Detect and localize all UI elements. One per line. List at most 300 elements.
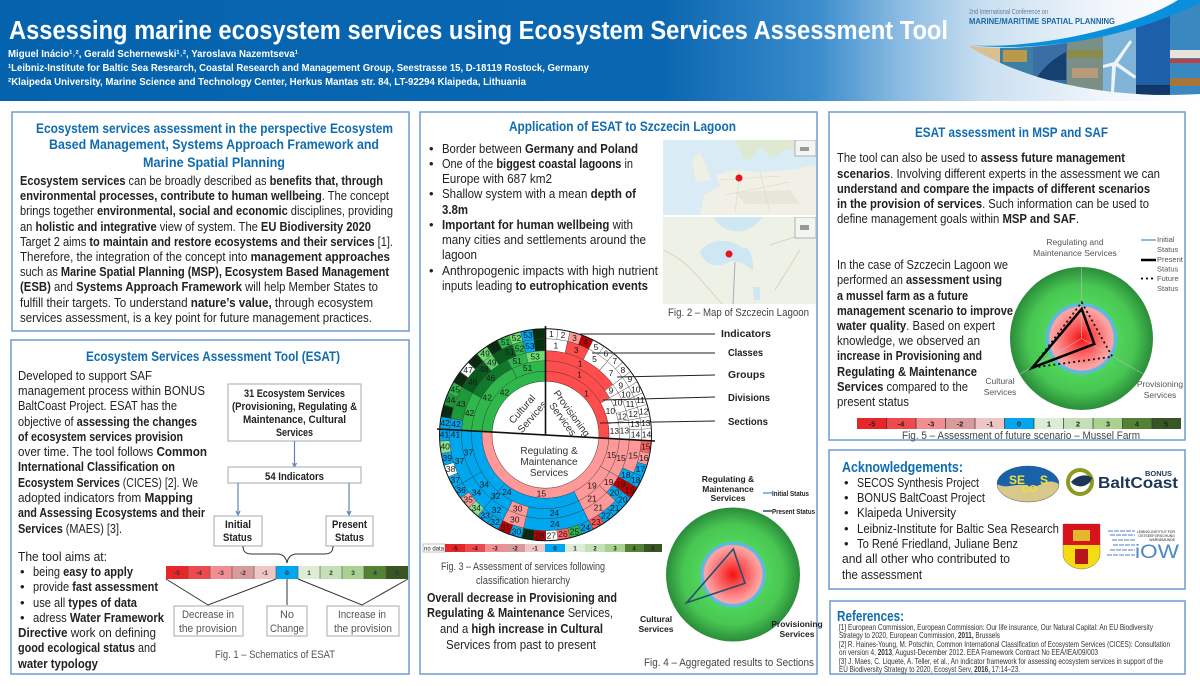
red location marker bbox=[736, 174, 742, 182]
figure 3 caption: classification hierarchy bbox=[476, 575, 570, 587]
sunburst legend: -4 bbox=[472, 546, 478, 552]
acknowledgement list: To René Friedland, Juliane Benz bbox=[857, 536, 1018, 551]
ring number labels: 49 bbox=[487, 358, 497, 368]
box: no change: Change bbox=[270, 623, 304, 635]
ring number labels: 44 bbox=[446, 395, 456, 405]
photo strip bbox=[968, 0, 1200, 100]
ring number labels: 1 bbox=[549, 329, 554, 339]
brace bbox=[243, 546, 333, 563]
panel heading: Ecosystem Services Assessment Tool (ESAT) bbox=[86, 348, 340, 364]
sunburst legend: -5 bbox=[452, 546, 458, 552]
axis labels: Services bbox=[780, 629, 815, 639]
hierarchy labels: Classes bbox=[728, 347, 763, 359]
colour scale: -4 bbox=[196, 570, 202, 577]
ring number labels: 11 bbox=[626, 399, 635, 409]
colour scale: 4 bbox=[373, 570, 377, 577]
ring number labels: 42 bbox=[440, 418, 450, 428]
bullet list: 3.8m bbox=[442, 202, 468, 217]
ring number labels: 1 bbox=[577, 370, 582, 380]
sunburst legend: -2 bbox=[512, 546, 518, 552]
ring number labels: 2 bbox=[561, 330, 566, 340]
aims list: • bbox=[20, 579, 25, 594]
ring number labels: 53 bbox=[530, 351, 540, 361]
panel heading: Application of ESAT to Szczecin Lagoon bbox=[509, 118, 736, 134]
hierarchy labels: Groups bbox=[728, 369, 765, 381]
map of Europe bbox=[663, 140, 816, 215]
box: increase bbox=[327, 606, 399, 636]
body text: Ecosystem services can be broadly described as benefits that, through bbox=[20, 173, 383, 188]
ring number labels: 53 bbox=[525, 341, 535, 351]
logo: IOW: LEIBNIZ-INSTITUT FÜR bbox=[1137, 530, 1175, 534]
aims list: provide fast assessment bbox=[33, 579, 159, 594]
figure 3 caption bbox=[441, 561, 605, 587]
axis labels: Maintenance Services bbox=[1033, 248, 1117, 258]
panel heading: Ecosystem services assessment in the perspective Ecosystem bbox=[36, 120, 393, 136]
acknowledgement list: Leibniz-Institute for Baltic Sea Research bbox=[857, 521, 1059, 536]
acknowledgement list: • bbox=[844, 521, 849, 536]
box: 54 indicators bbox=[228, 467, 361, 483]
description text: over time. The tool follows Common bbox=[18, 444, 207, 459]
colour scale: -5 bbox=[869, 420, 875, 428]
ring number labels: 20 bbox=[618, 495, 628, 505]
ring number labels: 4 bbox=[583, 337, 588, 347]
ring number labels: 50 bbox=[490, 342, 500, 352]
ring number labels: 30 bbox=[512, 526, 521, 536]
bullet list: • bbox=[429, 263, 434, 278]
bullet list: • bbox=[429, 186, 434, 201]
ring number labels: 37 bbox=[451, 475, 460, 485]
sector labels: Regulating & bbox=[520, 446, 578, 457]
description text: management process within BONUS bbox=[18, 383, 205, 398]
ring number labels: 28 bbox=[535, 531, 545, 541]
reference list: EU Biodiversity Strategy to 2020, Ecosyst Serv, 2016, 17:14–23. bbox=[839, 664, 1020, 674]
hierarchy labels: Indicators bbox=[721, 328, 771, 340]
ring number labels: 42 bbox=[483, 393, 492, 403]
bullet list: Shallow system with a mean depth of bbox=[442, 186, 637, 201]
ring number labels: 52 bbox=[512, 333, 521, 343]
body text: such as Marine Spatial Planning (MSP), Ecosystem Based Management bbox=[20, 264, 390, 279]
radar legend: Present Status bbox=[772, 507, 815, 516]
ring number labels: 37 bbox=[464, 447, 474, 457]
bullet list bbox=[429, 141, 658, 293]
ring number labels: 22 bbox=[601, 511, 611, 521]
ring number labels: 19 bbox=[625, 485, 635, 495]
ring number labels: 16 bbox=[639, 453, 649, 463]
acknowledgement list: the assessment bbox=[842, 567, 922, 582]
ring number labels: 42 bbox=[500, 387, 510, 397]
ring number labels: 13 bbox=[620, 426, 629, 436]
colour scale: -3 bbox=[928, 420, 934, 428]
upper text: define management goals within MSP and SAF. bbox=[837, 211, 1079, 226]
description text: objective of assessing the changes bbox=[18, 414, 197, 429]
sunburst legend: 0 bbox=[553, 546, 557, 552]
ring number labels: 41 bbox=[451, 430, 460, 440]
upper text bbox=[837, 150, 1160, 226]
bullet list: Important for human wellbeing with bbox=[442, 217, 633, 232]
body text: Therefore, the integration of the concept into management approaches bbox=[20, 249, 390, 264]
colour scale: 2 bbox=[1076, 420, 1080, 428]
aims list: The tool aims at: bbox=[18, 549, 107, 564]
acknowledgement list: SECOS Synthesis Project bbox=[857, 475, 979, 490]
radar chart: figure 5 bbox=[984, 235, 1184, 410]
colour scale: 5 bbox=[395, 570, 399, 577]
axis labels: Services bbox=[711, 493, 746, 503]
colour scale: 1 bbox=[1047, 420, 1051, 428]
ring number labels: 27 bbox=[547, 531, 556, 541]
ring number labels: 19 bbox=[587, 481, 597, 491]
colour scale bbox=[166, 566, 408, 579]
ring number labels: 32 bbox=[492, 505, 501, 515]
ring number labels: 20 bbox=[610, 488, 619, 498]
lower text: a mussel farm as a future bbox=[837, 288, 968, 303]
panel: application of ESAT bbox=[420, 112, 823, 674]
radar legend: Status bbox=[1157, 284, 1179, 293]
colour scale: -5 bbox=[174, 570, 180, 577]
sector labels bbox=[507, 389, 591, 479]
ring number labels: 1 bbox=[578, 359, 583, 369]
box: initial status: Status bbox=[223, 532, 252, 544]
figure 5 caption: Fig. 5 – Assessment of future scenario – Mussel Farm bbox=[902, 430, 1140, 442]
box: initial status bbox=[214, 516, 262, 546]
reference list bbox=[839, 622, 1170, 674]
axis labels: Cultural bbox=[985, 376, 1015, 386]
logo: BaltCoast bbox=[1068, 469, 1179, 494]
ring number labels: 42 bbox=[465, 408, 475, 418]
sunburst legend: 1 bbox=[573, 546, 577, 552]
description text: BaltCoast Project. ESAT has the bbox=[18, 398, 177, 413]
sunburst legend: 4 bbox=[632, 546, 636, 552]
ring number labels: 45 bbox=[451, 384, 460, 394]
figure 4 caption: Fig. 4 – Aggregated results to Sections bbox=[644, 657, 814, 669]
lower text: performed an assessment using bbox=[837, 272, 1002, 287]
ring number labels: 24 bbox=[581, 522, 590, 532]
acknowledgement list: BONUS BaltCoast Project bbox=[857, 490, 985, 505]
ring number labels: 51 bbox=[501, 337, 511, 347]
description text: Services (MAES) [3]. bbox=[18, 521, 122, 536]
conclusion text: and a high increase in Cultural bbox=[440, 621, 603, 636]
description text: and Assessing Ecosystems and their bbox=[18, 505, 205, 520]
sector labels: Services bbox=[546, 401, 578, 438]
radar legend: Initial bbox=[1157, 235, 1175, 244]
sunburst legend bbox=[423, 544, 662, 552]
logo: SECOS bbox=[997, 466, 1059, 502]
header banner bbox=[0, 0, 1200, 101]
box: 31 ecosystem services bbox=[228, 384, 361, 441]
colour scale: 4 bbox=[1135, 420, 1140, 428]
ring number labels: 12 bbox=[618, 411, 627, 421]
panel: ESAT tool bbox=[11, 340, 409, 674]
axis labels: Regulating & bbox=[702, 474, 754, 484]
colour scale: 5 bbox=[1164, 420, 1168, 428]
body text: brings together environmental, social and economic disciplines, providing bbox=[20, 203, 393, 218]
radar legend: Status bbox=[1157, 245, 1179, 254]
aims list: use all types of data bbox=[33, 595, 138, 610]
ring number labels: 48 bbox=[479, 364, 489, 374]
conference logo text: 2nd International Conference on bbox=[969, 7, 1048, 16]
panel: references bbox=[830, 601, 1185, 674]
future status triangle bbox=[1032, 302, 1112, 368]
ring number labels: 10 bbox=[613, 398, 623, 408]
description text bbox=[18, 368, 207, 536]
axis labels bbox=[984, 237, 1183, 400]
authors and affiliations: ²Klaipeda University, Marine Science and Technology Center, Herkus Mantas str. 84, LT-92294 Klaipeda, Lithuania bbox=[8, 76, 526, 88]
ring number labels: 49 bbox=[480, 349, 490, 359]
acknowledgement list: • bbox=[844, 490, 849, 505]
ring number labels: 19 bbox=[604, 477, 614, 487]
colour scale: -4 bbox=[898, 420, 905, 428]
sunburst legend: -3 bbox=[492, 546, 498, 552]
description text: Developed to support SAF bbox=[18, 368, 152, 383]
arrow bbox=[292, 441, 296, 467]
logo: BaltCoast: BaltCoast bbox=[1098, 475, 1179, 492]
axis labels: Services bbox=[639, 624, 674, 634]
ring number labels: 41 bbox=[440, 430, 449, 440]
panel: acknowledgements bbox=[829, 450, 1185, 589]
ring number labels: 18 bbox=[631, 475, 641, 485]
ring number labels: 18 bbox=[621, 470, 631, 480]
lower text: increase in Provisioning and bbox=[837, 348, 982, 363]
aims list: • bbox=[20, 595, 25, 610]
box: no change bbox=[267, 606, 307, 636]
ring number labels: 34 bbox=[472, 488, 482, 498]
ring number labels: 8 bbox=[621, 365, 626, 375]
lower text: knowledge, we observed an bbox=[837, 333, 980, 348]
ring number labels bbox=[440, 329, 651, 541]
bullet list: Anthropogenic impacts with high nutrient bbox=[442, 263, 658, 278]
sector divider lines bbox=[437, 326, 655, 441]
figure 3 caption: Fig. 3 – Assessment of services following bbox=[441, 561, 605, 573]
colour scale: -2 bbox=[957, 420, 963, 428]
panel heading: Based Management, Systems Approach Framework and bbox=[49, 136, 379, 152]
logo: IOW: iOW bbox=[1135, 542, 1179, 563]
title: Assessing marine ecosystem services using Ecosystem Services Assessment Tool bbox=[9, 17, 948, 45]
ring number labels: 15 bbox=[628, 450, 638, 460]
red location marker bbox=[726, 250, 732, 258]
ring number labels: 48 bbox=[471, 356, 481, 366]
ring number labels: 9 bbox=[609, 386, 614, 396]
colour scale: 0 bbox=[285, 570, 289, 577]
panel heading: ESAT assessment in MSP and SAF bbox=[915, 124, 1108, 140]
lower text: present status bbox=[837, 394, 909, 409]
lower text: management scenario to improve bbox=[837, 303, 1013, 318]
sunburst legend: 2 bbox=[593, 546, 597, 552]
panel: ecosystem services assessment bbox=[12, 112, 409, 331]
body text: an holistic and integrative view of system. The EU Biodiversity 2020 bbox=[20, 219, 371, 234]
ring number labels: 53 bbox=[523, 330, 533, 340]
logo: Klaipeda crest bbox=[1063, 524, 1100, 569]
ring number labels: 40 bbox=[440, 441, 450, 451]
ring number labels: 21 bbox=[610, 503, 620, 513]
logo: IOW: WARNEMÜNDE bbox=[1149, 538, 1176, 542]
ring number labels: 38 bbox=[446, 464, 456, 474]
description text: adopted indicators from Mapping bbox=[18, 490, 193, 505]
body text: environmental processes, contribute to human wellbeing. The concept bbox=[20, 188, 389, 203]
ring number labels: 51 bbox=[512, 356, 522, 366]
reference list: Strategy to 2020, European Commission, 2011, Brussels bbox=[839, 630, 1000, 640]
box: present status: Status bbox=[335, 532, 364, 544]
colour scale: -2 bbox=[240, 570, 246, 577]
colour scale: 3 bbox=[1106, 420, 1110, 428]
aims list: adress Water Framework bbox=[33, 610, 165, 625]
bullet list: lagoon bbox=[442, 247, 477, 262]
radar chart: figure 4 bbox=[639, 474, 823, 669]
box: increase: the provision bbox=[334, 623, 392, 635]
colour scale: 1 bbox=[307, 570, 311, 577]
sector labels: Maintenance bbox=[520, 457, 578, 468]
body text bbox=[20, 173, 393, 325]
panel heading: References: bbox=[837, 609, 904, 625]
conclusion text: Regulating & Maintenance Services, bbox=[427, 605, 613, 620]
ring number labels: 10 bbox=[621, 389, 631, 399]
body text: fulfill their targets. To understand nature’s value, through ecosystem bbox=[20, 295, 373, 310]
ring number labels: 15 bbox=[537, 489, 546, 499]
authors and affiliations: ¹Leibniz-Institute for Baltic Sea Research, Coastal Research and Management Group, Seestrasse 15, D-18119 Rostock, Germany bbox=[8, 62, 589, 74]
ring number labels: 17 bbox=[636, 464, 645, 474]
authors and affiliations: Miguel Inácio¹˒², Gerald Schernewski¹˒², Yaroslava Nazemtseva¹ bbox=[8, 48, 298, 60]
ring number labels: 34 bbox=[480, 480, 489, 490]
radar legend: Initial Status bbox=[772, 489, 809, 498]
box: decrease: Decrease in bbox=[182, 609, 234, 621]
acknowledgement list: Klaipeda University bbox=[857, 505, 956, 520]
aims list: Directive work on defining bbox=[18, 625, 156, 640]
colour scale: -1 bbox=[987, 420, 993, 428]
ring number labels: 51 bbox=[505, 347, 515, 357]
aims list: water typology bbox=[17, 656, 99, 671]
aims list bbox=[17, 549, 165, 671]
ring number labels: 35 bbox=[463, 495, 473, 505]
box: present status: Present bbox=[332, 519, 367, 531]
ring number labels: 52 bbox=[515, 343, 525, 353]
box: 31 ecosystem services: Services bbox=[276, 427, 313, 439]
box: initial status: Initial bbox=[225, 519, 251, 531]
hierarchy labels: Sections bbox=[728, 416, 768, 428]
map caption: Fig. 2 – Map of Szczecin Lagoon bbox=[668, 307, 809, 319]
ring number labels: 1 bbox=[584, 389, 589, 399]
sector labels: Provisioning bbox=[551, 389, 591, 439]
colour scale: -3 bbox=[218, 570, 224, 577]
ring number labels: 30 bbox=[513, 504, 523, 514]
ring number labels: 7 bbox=[612, 356, 617, 366]
logo: SECOS: CO bbox=[1022, 484, 1037, 495]
ring number labels: 19 bbox=[616, 479, 626, 489]
ring number labels: 46 bbox=[486, 373, 496, 383]
ring number labels: 24 bbox=[550, 519, 560, 529]
ring number labels: 12 bbox=[628, 409, 638, 419]
radar legend: Present bbox=[1157, 255, 1184, 264]
ring number labels: 3 bbox=[572, 333, 577, 343]
schematic diagram bbox=[166, 384, 408, 661]
lower text bbox=[836, 257, 1013, 409]
sector labels: Services bbox=[516, 399, 549, 435]
ring number labels: 39 bbox=[442, 453, 452, 463]
ring number labels: 26 bbox=[558, 529, 568, 539]
scale connector lines bbox=[166, 579, 408, 605]
ring number labels: 23 bbox=[591, 517, 601, 527]
box: increase: Increase in bbox=[338, 609, 386, 621]
box: present status bbox=[326, 516, 373, 546]
panel heading bbox=[36, 120, 393, 170]
sunburst chart bbox=[437, 326, 771, 541]
radar legend: Future bbox=[1157, 274, 1179, 283]
ring number labels: 14 bbox=[631, 430, 640, 440]
hierarchy labels: Divisions bbox=[728, 392, 770, 404]
ring number labels: 15 bbox=[641, 441, 651, 451]
ring number labels: 21 bbox=[587, 494, 597, 504]
box: no change: No bbox=[280, 609, 294, 621]
axis labels: Regulating and bbox=[1046, 237, 1104, 247]
sunburst legend: 5 bbox=[651, 546, 655, 552]
ring number labels: 33 bbox=[480, 511, 490, 521]
box: 31 ecosystem services: (Provisioning, Regulating & bbox=[232, 401, 357, 413]
box: 31 ecosystem services: 31 Ecosystem Services bbox=[244, 388, 345, 400]
bullet list: • bbox=[429, 141, 434, 156]
ring number labels: 1 bbox=[553, 340, 558, 350]
box: decrease: the provision bbox=[179, 623, 237, 635]
lower text: Regulating & Maintenance bbox=[837, 364, 977, 379]
bullet list: One of the biggest coastal lagoons in bbox=[442, 156, 633, 171]
hierarchy labels bbox=[721, 328, 771, 428]
logo: SECOS: SE bbox=[1009, 473, 1025, 487]
upper text: in the provision of services. Such information can be used to bbox=[837, 196, 1149, 211]
bullet list: many cities and settlements around the bbox=[442, 232, 646, 247]
lower text: Services compared to the bbox=[837, 379, 968, 394]
body text: (ESB) and Systems Approach Framework will help Member States to bbox=[20, 279, 378, 294]
bullet list: • bbox=[429, 217, 434, 232]
ring number labels: 46 bbox=[468, 377, 478, 387]
axis labels: Services bbox=[1144, 390, 1176, 400]
arrows to status boxes bbox=[236, 483, 351, 515]
ring number labels: 9 bbox=[628, 374, 633, 384]
axis labels: Provisioning bbox=[771, 619, 823, 629]
ring number labels: 10 bbox=[631, 384, 641, 394]
axis labels bbox=[639, 474, 823, 639]
box: decrease bbox=[174, 606, 243, 636]
bullet list: inputs leading to eutrophication events bbox=[442, 278, 648, 293]
ring number labels: 47 bbox=[463, 365, 473, 375]
aims list: being easy to apply bbox=[33, 564, 134, 579]
ring number labels: 46 bbox=[456, 374, 466, 384]
conclusion text: Services from past to present bbox=[446, 637, 596, 652]
logo: SECOS: S bbox=[1040, 473, 1048, 487]
acknowledgement list: • bbox=[844, 505, 849, 520]
box: 54 indicators: 54 Indicators bbox=[265, 471, 324, 483]
chart rings bbox=[440, 329, 652, 541]
colour scale: 2 bbox=[329, 570, 333, 577]
conclusion text bbox=[427, 590, 617, 652]
ring number labels: 32 bbox=[491, 491, 501, 501]
panel heading: Marine Spatial Planning bbox=[143, 154, 285, 170]
axis labels: Services bbox=[984, 387, 1016, 397]
colour scale: 0 bbox=[1017, 420, 1021, 428]
sector labels: Cultural bbox=[507, 393, 538, 426]
present status triangle bbox=[687, 549, 745, 603]
blue swoosh bbox=[968, 0, 1200, 47]
radar legend: Status bbox=[1157, 264, 1179, 274]
ring number labels: 10 bbox=[606, 406, 615, 416]
upper text: understand and compare the impacts of different scenarios bbox=[837, 181, 1150, 196]
ring number labels: 51 bbox=[523, 363, 533, 373]
ring number labels: 12 bbox=[639, 406, 649, 416]
map of lagoon bbox=[663, 217, 816, 304]
ring number labels: 6 bbox=[603, 349, 608, 359]
ring number labels: 25 bbox=[570, 526, 580, 536]
sector labels: Services bbox=[530, 468, 568, 479]
ring number labels: 5 bbox=[592, 354, 597, 364]
conclusion text: Overall decrease in Provisioning and bbox=[427, 590, 617, 605]
colour scale: -1 bbox=[262, 570, 268, 577]
figure caption: Fig. 1 – Schematics of ESAT bbox=[215, 649, 335, 661]
colour scale: 3 bbox=[351, 570, 355, 577]
